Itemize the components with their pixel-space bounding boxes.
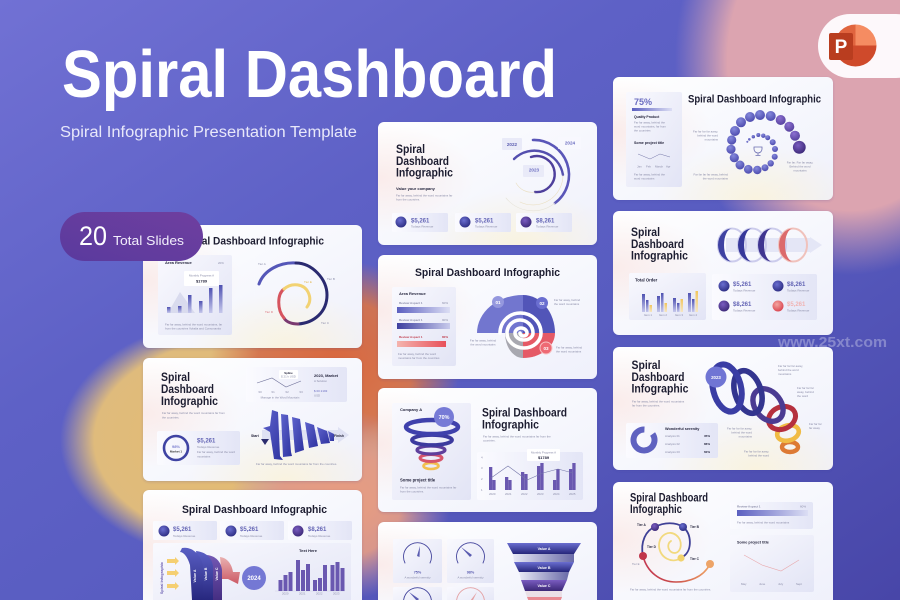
total order chart: Item 4 [689, 313, 697, 317]
market donut panel: 98% [172, 444, 180, 449]
bar and line chart: 2022 [521, 492, 528, 496]
side panel: word mountains, far from [634, 124, 667, 128]
rings and arrow [718, 228, 822, 262]
panel: slide 1 spiral tiers: Tier A [258, 262, 266, 266]
heading: Dashboard [631, 238, 684, 251]
stat grid [712, 274, 817, 320]
heading: Dashboard [632, 371, 684, 384]
panel: slide 9 ring arrow [613, 211, 833, 335]
heading: Spiral [161, 371, 190, 384]
stat boxes [153, 521, 352, 540]
company panel: Far far away, behind the word mountains far [400, 486, 456, 490]
side panel: Far far away, behind the [634, 120, 665, 124]
line chart panel: '21 [271, 390, 275, 394]
panel: slide 10 spiral rings: Far far far far away, [778, 364, 803, 368]
bar and line chart: 1 [481, 488, 483, 492]
line chart panel: Manage in the Word Mountain [261, 396, 300, 400]
panel: slide 8 bead spiral: Far far far far away, [693, 130, 718, 134]
panel: slide 8 bead spiral: Spiral Dashboard Infographic [688, 94, 821, 106]
panel: slide 10 spiral rings [613, 347, 833, 470]
heading: Spiral Dashboard [482, 406, 567, 420]
company panel [392, 403, 471, 500]
stat boxes: $5,261 [240, 527, 259, 533]
panel: slide 11 spiral line tiers: Tier A [637, 523, 647, 527]
progress bars panel: mountains far from the countries [398, 356, 440, 360]
progress bars panel: Review Aspect 1 [399, 301, 423, 305]
area revenue panel: Far far away, behind the word mountains, far [165, 322, 222, 326]
panel: slide 5 spiral sectors: Spiral Dashboard Infographic [415, 267, 560, 279]
stat boxes: Todays Revenue [411, 224, 434, 228]
panel: slide 11 spiral line tiers: Tier D [647, 545, 657, 549]
heading [631, 226, 688, 262]
panel: slide 2 spiral cone: Far far away, behind the word mountains far from [162, 411, 226, 415]
progress bars panel: 60% [442, 301, 448, 305]
line chart panel: '20 [258, 390, 262, 394]
heading [630, 492, 708, 516]
stat grid: Todays Revenue [733, 308, 756, 312]
progress bars panel [392, 287, 456, 366]
year badge [706, 366, 726, 388]
stat boxes: Todays Revenue [536, 224, 559, 228]
stat boxes [392, 213, 572, 232]
company panel: from the countries. [400, 490, 424, 494]
badge: total slides: Total Slides [113, 233, 185, 248]
side panel: Some project title [634, 141, 664, 145]
panel: slide 3 ribbon and bars [143, 490, 362, 600]
spiral sectors chart [477, 295, 555, 358]
title: Spiral Dashboard [62, 37, 557, 112]
total order chart: Item 1 [644, 313, 652, 317]
market donut panel: Market 1 [170, 450, 182, 454]
gauge tiles: A wonderful serenity [457, 576, 484, 580]
bar and line chart: 2023 [537, 492, 544, 496]
gauge tiles: A wonderful serenity [404, 576, 431, 580]
panel: slide 8 bead spiral [613, 77, 833, 200]
panel: slide 8 bead spiral: behind the word [697, 134, 718, 138]
panel: slide 10 spiral rings: the word [797, 394, 808, 398]
line chart panel: '23 [299, 390, 303, 394]
side panel: March [655, 164, 663, 168]
panel: slide 6 funnel spiral: countries. [483, 438, 496, 442]
panel: slide 4 year arcs: from the countries. [396, 198, 420, 202]
stat boxes: $5,261 [173, 527, 192, 533]
total order chart: Item 3 [675, 313, 683, 317]
donut and table: Analysis 03 [665, 450, 680, 454]
market donut panel: Far far away, behind the word [197, 450, 235, 454]
progress bars panel: Far far away, behind the word [398, 352, 436, 356]
spiral chart [259, 263, 327, 324]
panel: slide 8 bead spiral: Behind the word [790, 164, 811, 168]
stat grid: Todays Revenue [787, 288, 810, 292]
bar and line chart: 2020 [489, 492, 496, 496]
panel: slide 10 spiral rings: far away [809, 426, 820, 430]
company panel: 70% [439, 415, 450, 421]
panel: slide 10 spiral rings: away, behind [797, 390, 814, 394]
market donut panel: mountains [197, 454, 211, 458]
panel: slide 5 spiral sectors: the word mountains [470, 342, 496, 346]
area revenue panel: 20% [218, 261, 224, 265]
stat boxes: $5,261 [411, 218, 430, 224]
funnel: Value C [538, 584, 551, 588]
panel: slide 10 spiral rings: behind the word [731, 430, 752, 434]
progress bars panel: Area Revenue [399, 291, 426, 296]
heading: Spiral [396, 143, 425, 156]
donut and table: 35% [704, 434, 710, 438]
bar chart: 2020 [282, 592, 289, 596]
total order chart: Item 2 [659, 313, 667, 317]
line chart panel: $ 00 2193 [314, 389, 328, 393]
heading: Dashboard [161, 383, 214, 396]
panel: slide 2 spiral cone [143, 358, 362, 481]
stat boxes: $5,261 [475, 218, 494, 224]
panel: slide 1 spiral tiers: Tier C [321, 321, 330, 325]
panel: slide 4 year arcs: Far far away, behind the word mountains far [396, 194, 452, 198]
spiral sectors chart: 01 [495, 300, 501, 305]
bar and line chart: 3 [481, 466, 483, 470]
side panel: 75% [634, 97, 652, 107]
heading: Spiral Dashboard [630, 492, 708, 504]
panel: slide 5 spiral sectors: Far far away, behind [556, 346, 583, 350]
donut and table: Analysis 01 [665, 434, 680, 438]
panel: slide 4 year arcs: Value your company [396, 186, 436, 191]
area revenue panel: from the countries Vokalia and Consonantia [165, 326, 221, 330]
market donut panel [157, 431, 240, 465]
bar and line chart: 2021 [505, 492, 512, 496]
bar chart: 2023 [333, 592, 340, 596]
bar chart: 2022 [316, 592, 323, 596]
panel: slide 11 spiral line tiers: Tier E [632, 562, 640, 566]
panel: slide 2 spiral cone: the countries. [162, 416, 180, 420]
progress bars panel: 90% [442, 318, 448, 322]
stat grid: $8,261 [733, 302, 752, 308]
bar chart: 2021 [299, 592, 306, 596]
panel: slide 10 spiral rings: mountains [778, 372, 792, 376]
funnel: Value B [538, 566, 551, 570]
stat grid: $8,261 [787, 282, 806, 288]
ribbon segments: Value B [204, 567, 208, 580]
donut and table [626, 423, 718, 458]
review aspect panel: Review Aspect 1 [737, 504, 761, 508]
panel: slide 10 spiral rings: Far far away, behind the word mountains [632, 400, 685, 404]
market donut panel: Todays Revenue [197, 445, 220, 449]
donut and table: Wonderful serenity [665, 427, 700, 431]
spiral cone chart: Start [251, 434, 260, 438]
panel: slide 8 bead spiral: the word mountains [703, 176, 729, 180]
stat grid: $5,261 [787, 302, 806, 308]
line chart panel [246, 367, 347, 402]
ribbon segments [180, 548, 240, 600]
area revenue panel: $1789 [196, 278, 208, 284]
subtitle: Spiral Infographic Presentation Template [60, 124, 357, 141]
year labels: 2023 [529, 168, 540, 172]
spiral cone chart: Finish [334, 434, 344, 438]
panel: slide 8 bead spiral: Far far. Far far away, [787, 160, 813, 164]
panel: slide 11 spiral line tiers: Tier C [690, 557, 700, 561]
total order chart: Total Order [635, 278, 658, 282]
stat grid: $5,261 [733, 282, 752, 288]
heading: Infographic [631, 250, 688, 262]
area revenue panel: Area Revenue [165, 260, 192, 265]
ribbon segments: Value A [193, 569, 197, 582]
bar chart [275, 548, 345, 596]
heading [632, 359, 689, 396]
year badge [242, 566, 266, 590]
heading: Spiral [631, 226, 660, 239]
side panel: Jan [637, 164, 642, 168]
panel: slide 1 spiral tiers: Tier B [327, 277, 335, 281]
concentric arcs [506, 140, 569, 211]
heading: Infographic [161, 395, 218, 408]
stat boxes: $8,261 [308, 527, 327, 533]
side panel: the countries [634, 128, 651, 132]
stat boxes: Todays Revenue [308, 534, 331, 538]
bar and line chart: $1789 [538, 455, 550, 460]
panel: slide 10 spiral rings: far from the countries. [632, 404, 660, 408]
heading: Infographic [396, 166, 453, 180]
project line chart panel: June [759, 582, 766, 586]
panel: slide 10 spiral rings: Far far far far [797, 386, 814, 390]
stat boxes: Todays Revenue [240, 534, 263, 538]
market donut panel: $5,261 [197, 438, 216, 444]
donut and table: 86% [704, 442, 710, 446]
year labels: 2022 [507, 142, 518, 147]
bar and line chart [477, 449, 583, 500]
heading: Spiral [632, 359, 660, 372]
review aspect panel: 60% [800, 504, 806, 508]
icon: powerpoint logo badge [818, 14, 900, 78]
panel: slide 5 spiral sectors [378, 255, 597, 379]
side panel: Far far away, behind the [634, 172, 665, 176]
progress bars panel: 80% [442, 335, 448, 339]
heading [396, 143, 453, 180]
project line chart panel [730, 535, 814, 592]
funnel [507, 543, 581, 600]
panel: slide 11 spiral line tiers: Far far away, behind the word mountains far from the countries. [630, 588, 711, 592]
line chart panel: Spline [284, 371, 293, 375]
gauge tiles: 98% [467, 570, 475, 574]
bar and line chart: 2024 [553, 492, 560, 496]
heading [482, 406, 567, 432]
badge: total slides: 20 [79, 221, 107, 251]
funnel: Value A [538, 547, 551, 551]
panel: slide 6 funnel spiral [378, 388, 597, 512]
panel: slide 5 spiral sectors: the word mountains [554, 302, 580, 306]
side panel [626, 92, 682, 187]
panel: slide 11 spiral line tiers [613, 482, 833, 600]
panel: slide 10 spiral rings: mountains [739, 434, 753, 438]
gauge tiles: 75% [414, 570, 422, 574]
badge: total slides [60, 212, 203, 261]
icon: powerpoint logo badge: P [835, 37, 848, 58]
panel: slide 1 spiral tiers: Tier E [304, 280, 312, 284]
year badge: 2023 [711, 375, 721, 380]
project line chart panel: Sept [796, 582, 802, 586]
yellow arrows [167, 557, 179, 590]
bead spiral [726, 110, 806, 174]
heading: Infographic [630, 503, 682, 516]
stat grid: Todays Revenue [733, 288, 756, 292]
panel: slide 5 spiral sectors: Far far away, behind [554, 298, 581, 302]
donut and table: Analysis 02 [665, 442, 680, 446]
bar and line chart: 2 [481, 477, 483, 481]
panel: slide 8 bead spiral: Far far far far away, behind [694, 172, 728, 176]
project line chart panel: Some project title [737, 540, 769, 544]
project line chart panel: May [741, 582, 747, 586]
progress bars panel: Review Aspect 1 [399, 335, 423, 339]
panel: slide 10 spiral rings: behind the word [748, 454, 769, 458]
panel: slide 10 spiral rings: Far far far far away, [727, 426, 752, 430]
bar and line chart: 4 [481, 456, 483, 460]
company panel: Company A [400, 407, 422, 412]
year badge: 2024 [247, 576, 261, 582]
heading: Infographic [632, 382, 689, 396]
panel: slide 10 spiral rings: behind the word [778, 368, 799, 372]
spiral sectors chart: 02 [539, 301, 545, 306]
panel: slide 1 spiral tiers: Spiral Dashboard Infographic [182, 236, 324, 248]
gauge tiles [393, 539, 494, 600]
bar chart: Text Here [299, 548, 318, 553]
heading [161, 371, 218, 408]
panel: slide 2 spiral cone: Far far away, behind the word mountains far from the countries. [256, 462, 337, 466]
donut and table: 60% [704, 450, 710, 454]
panel: slide 3 ribbon and bars: Spiral Dashboard Infographic [182, 504, 327, 516]
total order chart [629, 273, 706, 320]
line chart panel: USD [314, 394, 320, 398]
spiral cone chart [251, 410, 349, 460]
bar and line chart: Monthly Progress A [531, 450, 556, 454]
line chart panel: $ 21 k USD [281, 374, 296, 378]
year labels [502, 137, 581, 177]
stat boxes: Todays Revenue [173, 534, 196, 538]
panel: slide 10 spiral rings: Far far far [809, 422, 822, 426]
side panel: Apr [666, 164, 671, 168]
ribbon segments: Value C [215, 567, 219, 580]
panel: slide 7 gauges and funnel [378, 522, 597, 600]
watermark: www.25xt.com [777, 335, 887, 351]
spiral sectors chart: 03 [543, 346, 549, 351]
spiral rings chart [708, 361, 801, 452]
line chart panel: '22 [285, 390, 289, 394]
panel: slide 8 bead spiral: mountains [793, 168, 807, 172]
review aspect panel [730, 502, 813, 529]
area revenue panel [158, 255, 232, 335]
panel: slide 11 spiral line tiers: Tier B [690, 525, 700, 529]
panel: slide 6 funnel spiral: Far far away, behind the word mountains far from the [483, 434, 551, 438]
side panel: word mountains [634, 176, 655, 180]
year labels: 2024 [565, 140, 576, 146]
panel: slide 4 year arcs [378, 122, 597, 245]
icon: trophy [754, 147, 762, 156]
panel: slide 1 spiral tiers [143, 225, 362, 348]
company panel: Some project title [400, 478, 436, 482]
stat boxes: $8,261 [536, 218, 555, 224]
spiral tiers [642, 523, 710, 582]
stat boxes: Todays Revenue [475, 224, 498, 228]
panel: slide 8 bead spiral: mountains [705, 138, 719, 142]
heading: Infographic [482, 418, 539, 432]
line chart panel: 2023, Market [314, 373, 339, 378]
project line chart panel: July [778, 582, 784, 586]
panel: slide 1 spiral tiers: Tier D [265, 310, 274, 314]
panel: slide 3 ribbon and bars: Spiral Infographic [160, 562, 164, 594]
heading: Dashboard [396, 155, 449, 168]
panel: slide 5 spiral sectors: Far far away, behind [470, 338, 496, 342]
stat grid: Todays Revenue [787, 308, 810, 312]
side panel: Feb [646, 164, 651, 168]
progress bars panel: Review Aspect 1 [399, 318, 423, 322]
line chart panel: A Solution [314, 379, 327, 383]
area revenue panel: Monthly Progress A [189, 274, 214, 278]
panel: slide 10 spiral rings: Far far far far away, [744, 450, 769, 454]
side panel: Quality Product [634, 115, 660, 119]
panel: slide 5 spiral sectors: the word mountains [556, 350, 582, 354]
review aspect panel: Far far away, behind the word mountains [737, 520, 790, 524]
bar and line chart: 2025 [569, 492, 576, 496]
